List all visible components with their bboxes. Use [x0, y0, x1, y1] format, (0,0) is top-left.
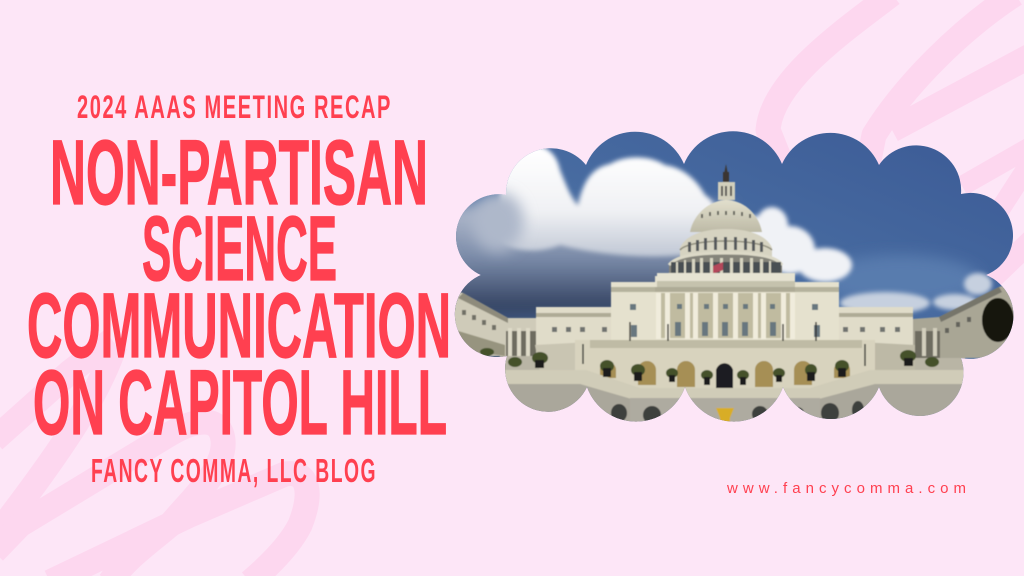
- balustrade: [500, 370, 965, 400]
- base fill behind stairs and terraces: [500, 355, 966, 371]
- lamp posts: [583, 322, 865, 366]
- decorative ribbons bottom left: [0, 340, 307, 576]
- lower arches: [610, 400, 864, 421]
- side terraces: [508, 384, 630, 421]
- dome: [657, 164, 795, 287]
- flag: [713, 262, 723, 274]
- stair wedges: [534, 342, 575, 370]
- side wings: [536, 307, 612, 347]
- title: COMMUNICATION: [27, 275, 451, 377]
- capitol building: [450, 164, 1015, 426]
- byline: Fancy Comma, LLC Blog: FANCY COMMA, LLC BLOG: [91, 452, 377, 489]
- far right wing: [912, 282, 1015, 358]
- kicker: 2024 AAAS Meeting Recap: 2024 AAAS MEETING RECAP: [77, 89, 392, 125]
- website url: www.fancycomma.com: [726, 480, 968, 497]
- potted plants: [480, 348, 939, 385]
- sky: [450, 125, 1020, 425]
- decorative ribbons top right: [768, 0, 1024, 285]
- far left wing: [455, 292, 537, 357]
- terrace facade: [575, 340, 876, 388]
- title: NON-PARTISAN: [50, 122, 428, 224]
- portico: [654, 275, 658, 283]
- arched windows: [600, 361, 850, 387]
- clouds: [440, 145, 992, 315]
- title: [27, 122, 451, 454]
- central block: [611, 282, 839, 344]
- golden fixture: [716, 408, 734, 422]
- cloud soft left edge: [472, 192, 524, 252]
- title: ON CAPITOL HILL: [33, 352, 447, 454]
- photo: US Capitol in scalloped cloud frame: [440, 125, 1020, 426]
- title: SCIENCE: [142, 198, 337, 300]
